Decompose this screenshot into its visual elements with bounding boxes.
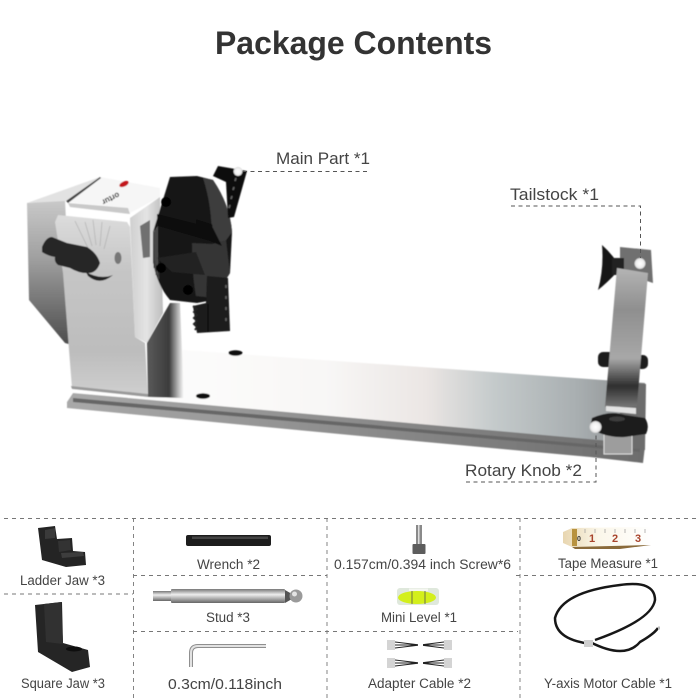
upper jaw xyxy=(213,166,247,218)
icon: wrench xyxy=(186,535,271,546)
item: hex key xyxy=(168,646,282,693)
icon: adapter cables xyxy=(387,640,452,668)
illustration: rotary roller assembly xyxy=(27,166,653,463)
item: square jaw xyxy=(21,602,105,691)
base plate xyxy=(67,350,646,463)
logo: ortur xyxy=(100,190,121,207)
item: screw xyxy=(334,525,511,572)
item: mini level xyxy=(381,588,457,625)
marker dots xyxy=(234,167,646,433)
item: screw: 0.157cm/0.394 inch Screw*6 xyxy=(334,557,511,572)
locking knob xyxy=(42,237,100,273)
item: mini level: Mini Level *1 xyxy=(381,610,457,625)
item: adapter cable: Adapter Cable *2 xyxy=(368,676,471,691)
callout: tailstock: Tailstock *1 xyxy=(510,186,599,204)
item: wrench xyxy=(186,535,271,572)
item: stud: Stud *3 xyxy=(206,610,250,625)
item: adapter cable xyxy=(368,640,471,691)
item: motor cable xyxy=(544,584,672,691)
item: ladder jaw: Ladder Jaw *3 xyxy=(20,573,105,588)
main part body xyxy=(27,177,184,398)
item: tape measure xyxy=(558,527,658,571)
icon: ladder jaw xyxy=(38,526,86,567)
icon: tape measure: 2 xyxy=(612,533,618,545)
callout: rotary knob xyxy=(465,433,596,482)
icon: square jaw xyxy=(35,602,90,672)
icon: tape measure: 0 xyxy=(577,536,581,543)
item: ladder jaw xyxy=(20,526,105,588)
title: Package Contents xyxy=(215,25,492,61)
item: tape measure: Tape Measure *1 xyxy=(558,556,658,571)
icon: tape measure: 3 xyxy=(635,533,641,545)
accessories grid lines xyxy=(4,518,696,698)
callout: tailstock xyxy=(510,186,640,258)
chuck xyxy=(140,166,247,333)
item: stud xyxy=(153,589,302,625)
icon: tape measure: 1 xyxy=(589,533,595,545)
icon: hex key xyxy=(191,646,266,667)
logo xyxy=(100,180,130,207)
lower jaw xyxy=(193,276,230,333)
item: motor cable: Y-axis Motor Cable *1 xyxy=(544,676,672,691)
dial marks xyxy=(75,220,110,249)
callout: main part xyxy=(243,150,370,172)
item: square jaw: Square Jaw *3 xyxy=(21,676,105,691)
callout: main part: Main Part *1 xyxy=(276,150,370,168)
item: hex key: 0.3cm/0.118inch xyxy=(168,676,282,693)
item: wrench: Wrench *2 xyxy=(197,557,260,572)
icon: stud xyxy=(153,589,302,603)
icon: screw xyxy=(412,525,426,554)
callout: rotary knob: Rotary Knob *2 xyxy=(465,462,582,480)
icon: tape measure xyxy=(563,527,652,549)
icon: motor cable xyxy=(555,584,660,651)
icon: mini level xyxy=(397,588,439,605)
tailstock xyxy=(590,245,653,454)
